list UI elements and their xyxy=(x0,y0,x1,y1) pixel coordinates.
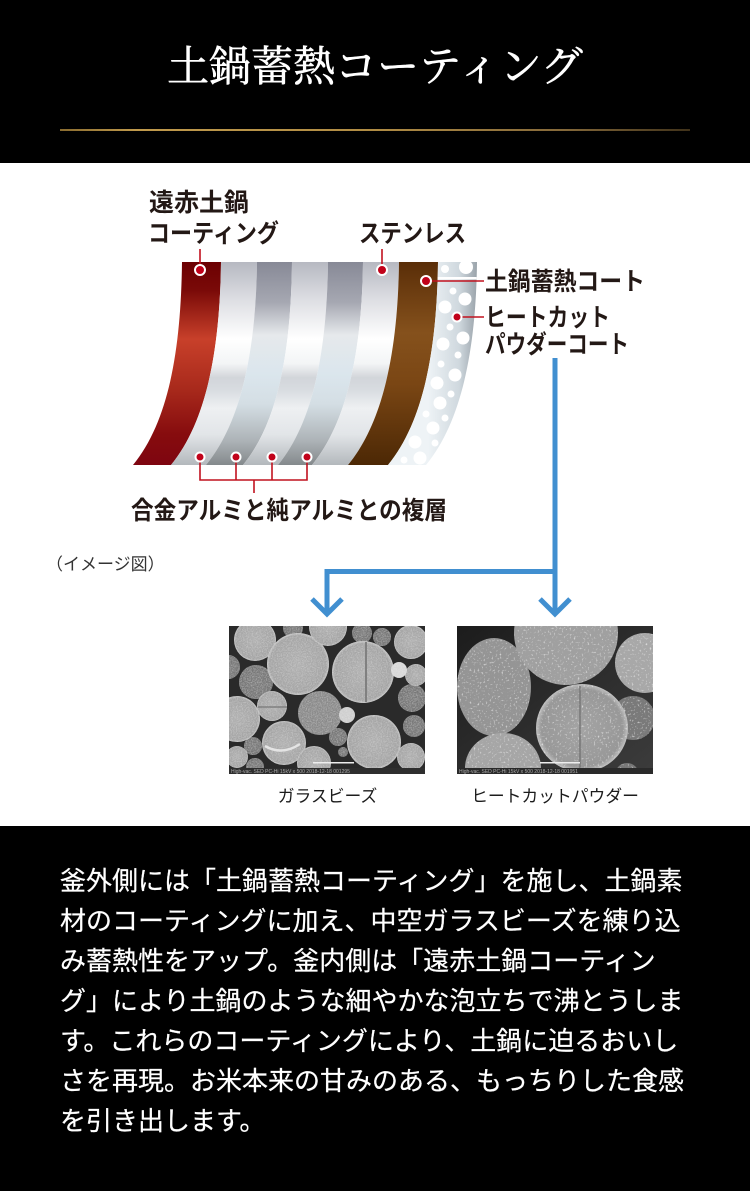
label: stainless: ステンレス xyxy=(359,220,466,248)
caption: heat-cut powder: ヒートカットパウダー xyxy=(471,787,639,806)
label: donabe heat-storage coat: 土鍋蓄熱コート xyxy=(485,268,645,296)
photo: glass beads: High-vac. SED PC-Hi 15kV x 500 2018-12-18 001295 xyxy=(231,769,350,775)
band: aluminium layer 2 xyxy=(206,262,292,465)
caption: glass beads: ガラスビーズ xyxy=(278,787,377,806)
photo: heat-cut powder xyxy=(457,626,653,774)
body text xyxy=(60,866,684,1136)
body text: み蓄熱性をアップ。釜内側は「遠赤土鍋コーティン xyxy=(60,946,656,976)
band: aluminium layer 3 xyxy=(243,262,328,465)
band: aluminium layer 1 xyxy=(171,262,257,465)
label: far-infrared donabe coating: 遠赤土鍋 xyxy=(149,189,249,217)
gold divider xyxy=(60,129,690,131)
body text: グ」により土鍋のような細やかな泡立ちで沸とうしま xyxy=(60,986,683,1016)
blue arrows xyxy=(312,358,570,614)
band: heat-cut powder coat with bubbles xyxy=(388,260,478,465)
layered coating diagram xyxy=(133,260,478,465)
band: far-infrared donabe coating (red) xyxy=(133,262,221,465)
photo: heat-cut powder: High-vac. SED PC-Hi 15kV x 500 2018-12-18 001951 xyxy=(459,769,578,775)
body text: を引き出します。 xyxy=(60,1106,265,1136)
body text: さを再現。お米本来の甘みのある、もっちりした食感 xyxy=(60,1066,684,1096)
diagram and photos xyxy=(58,190,653,804)
photo: glass beads xyxy=(229,626,425,774)
band: stainless xyxy=(312,262,399,465)
band: aluminium layer 4 xyxy=(278,262,363,465)
body text: す。これらのコーティングにより、土鍋に迫るおいし xyxy=(60,1026,678,1056)
body text: 釜外側には「土鍋蓄熱コーティング」を施し、土鍋素 xyxy=(60,866,682,896)
label: heat-cut: ヒートカット xyxy=(485,304,610,332)
note: image only: （イメージ図） xyxy=(46,555,165,574)
band: donabe heat-storage coat (brown) xyxy=(348,262,438,465)
title: 土鍋蓄熱コーティング xyxy=(167,45,583,91)
body text: 材のコーティングに加え、中空ガラスビーズを練り込 xyxy=(60,906,681,936)
label: powder coat: パウダーコート xyxy=(485,330,629,359)
label: coating: コーティング xyxy=(148,219,279,248)
leader lines and callout dots xyxy=(195,249,484,493)
diagram labels xyxy=(131,189,645,525)
label: aluminium multi-layer: 合金アルミと純アルミとの複層 xyxy=(131,497,447,525)
